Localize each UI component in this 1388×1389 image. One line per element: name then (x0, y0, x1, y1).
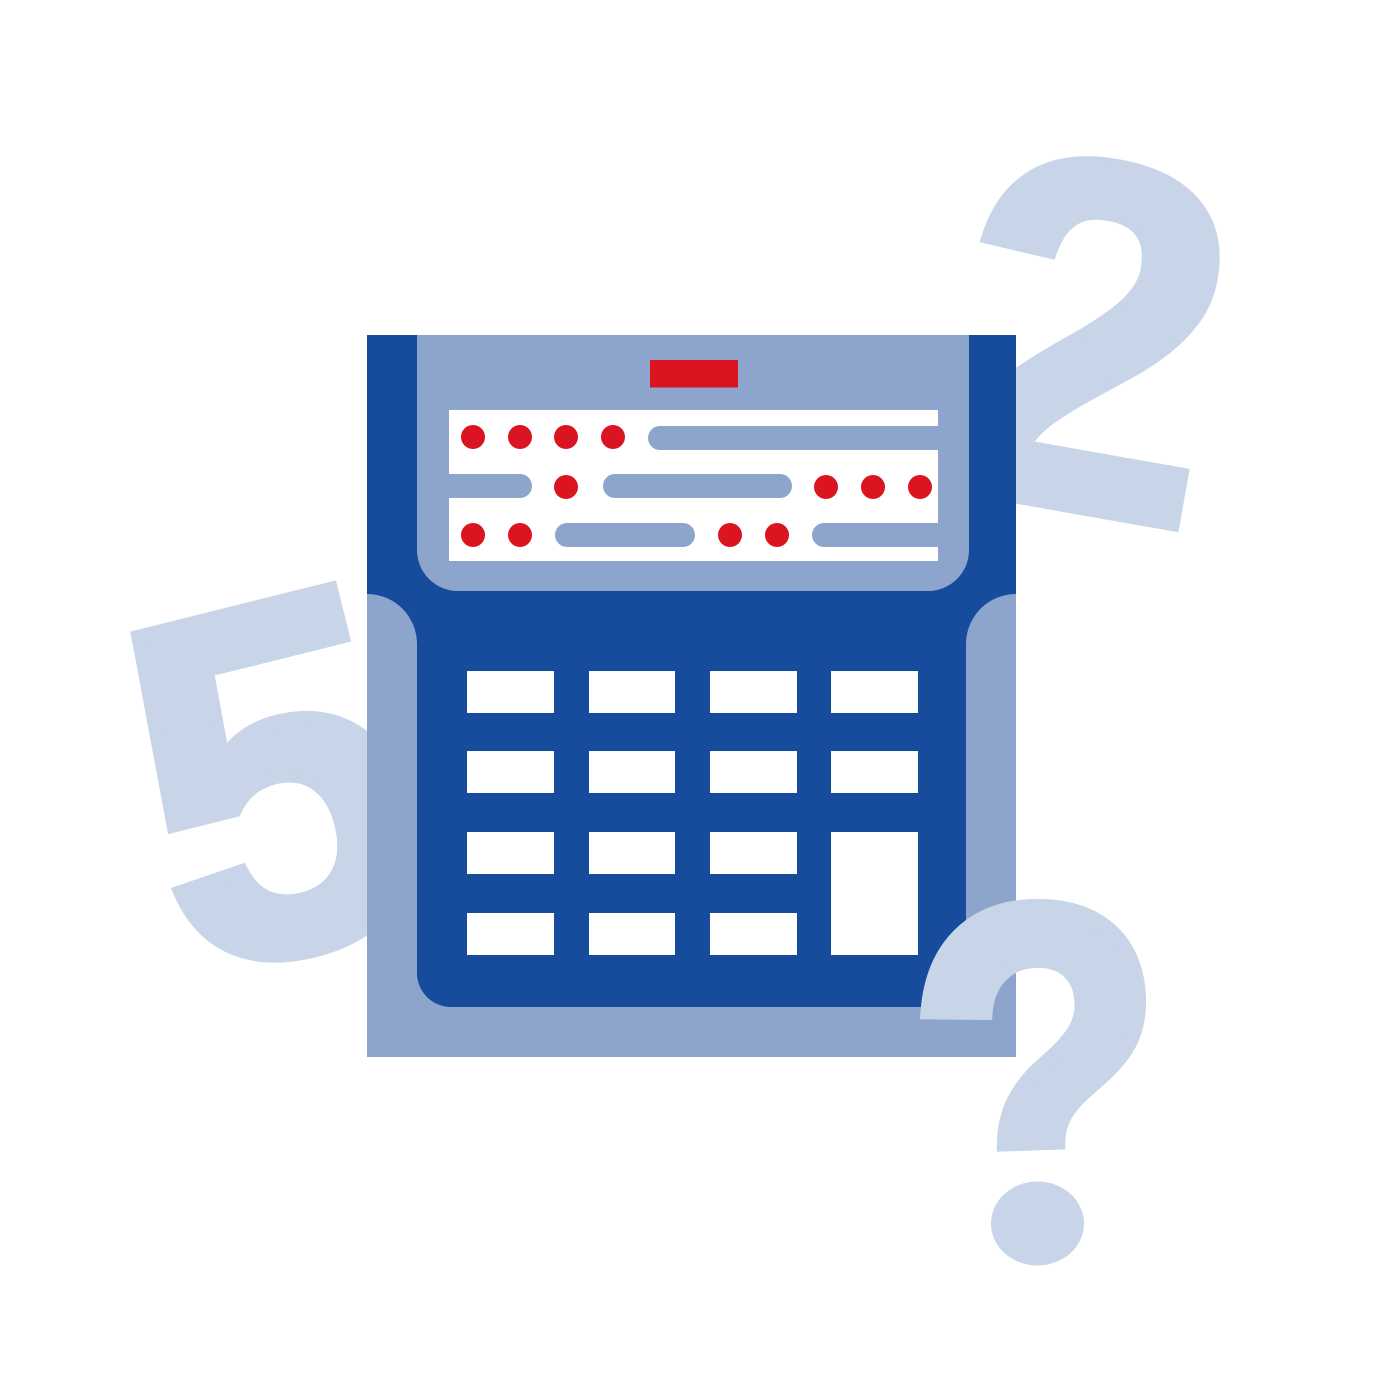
digit 2: 2 (903, 37, 1274, 636)
calculator (367, 335, 1016, 1057)
digit 5: 5 (76, 475, 473, 1082)
display dots (461, 425, 932, 547)
question mark dot (991, 1182, 1084, 1266)
question mark (920, 899, 1146, 1266)
question mark: ? (901, 805, 1175, 1349)
keypad (467, 671, 918, 955)
display bars (449, 426, 938, 547)
lower frame (367, 594, 1016, 1057)
calculator illustration (130, 156, 1220, 1266)
red indicator (650, 360, 738, 388)
paper holder (417, 335, 969, 591)
calculator body (367, 335, 1016, 1057)
display (449, 410, 938, 561)
